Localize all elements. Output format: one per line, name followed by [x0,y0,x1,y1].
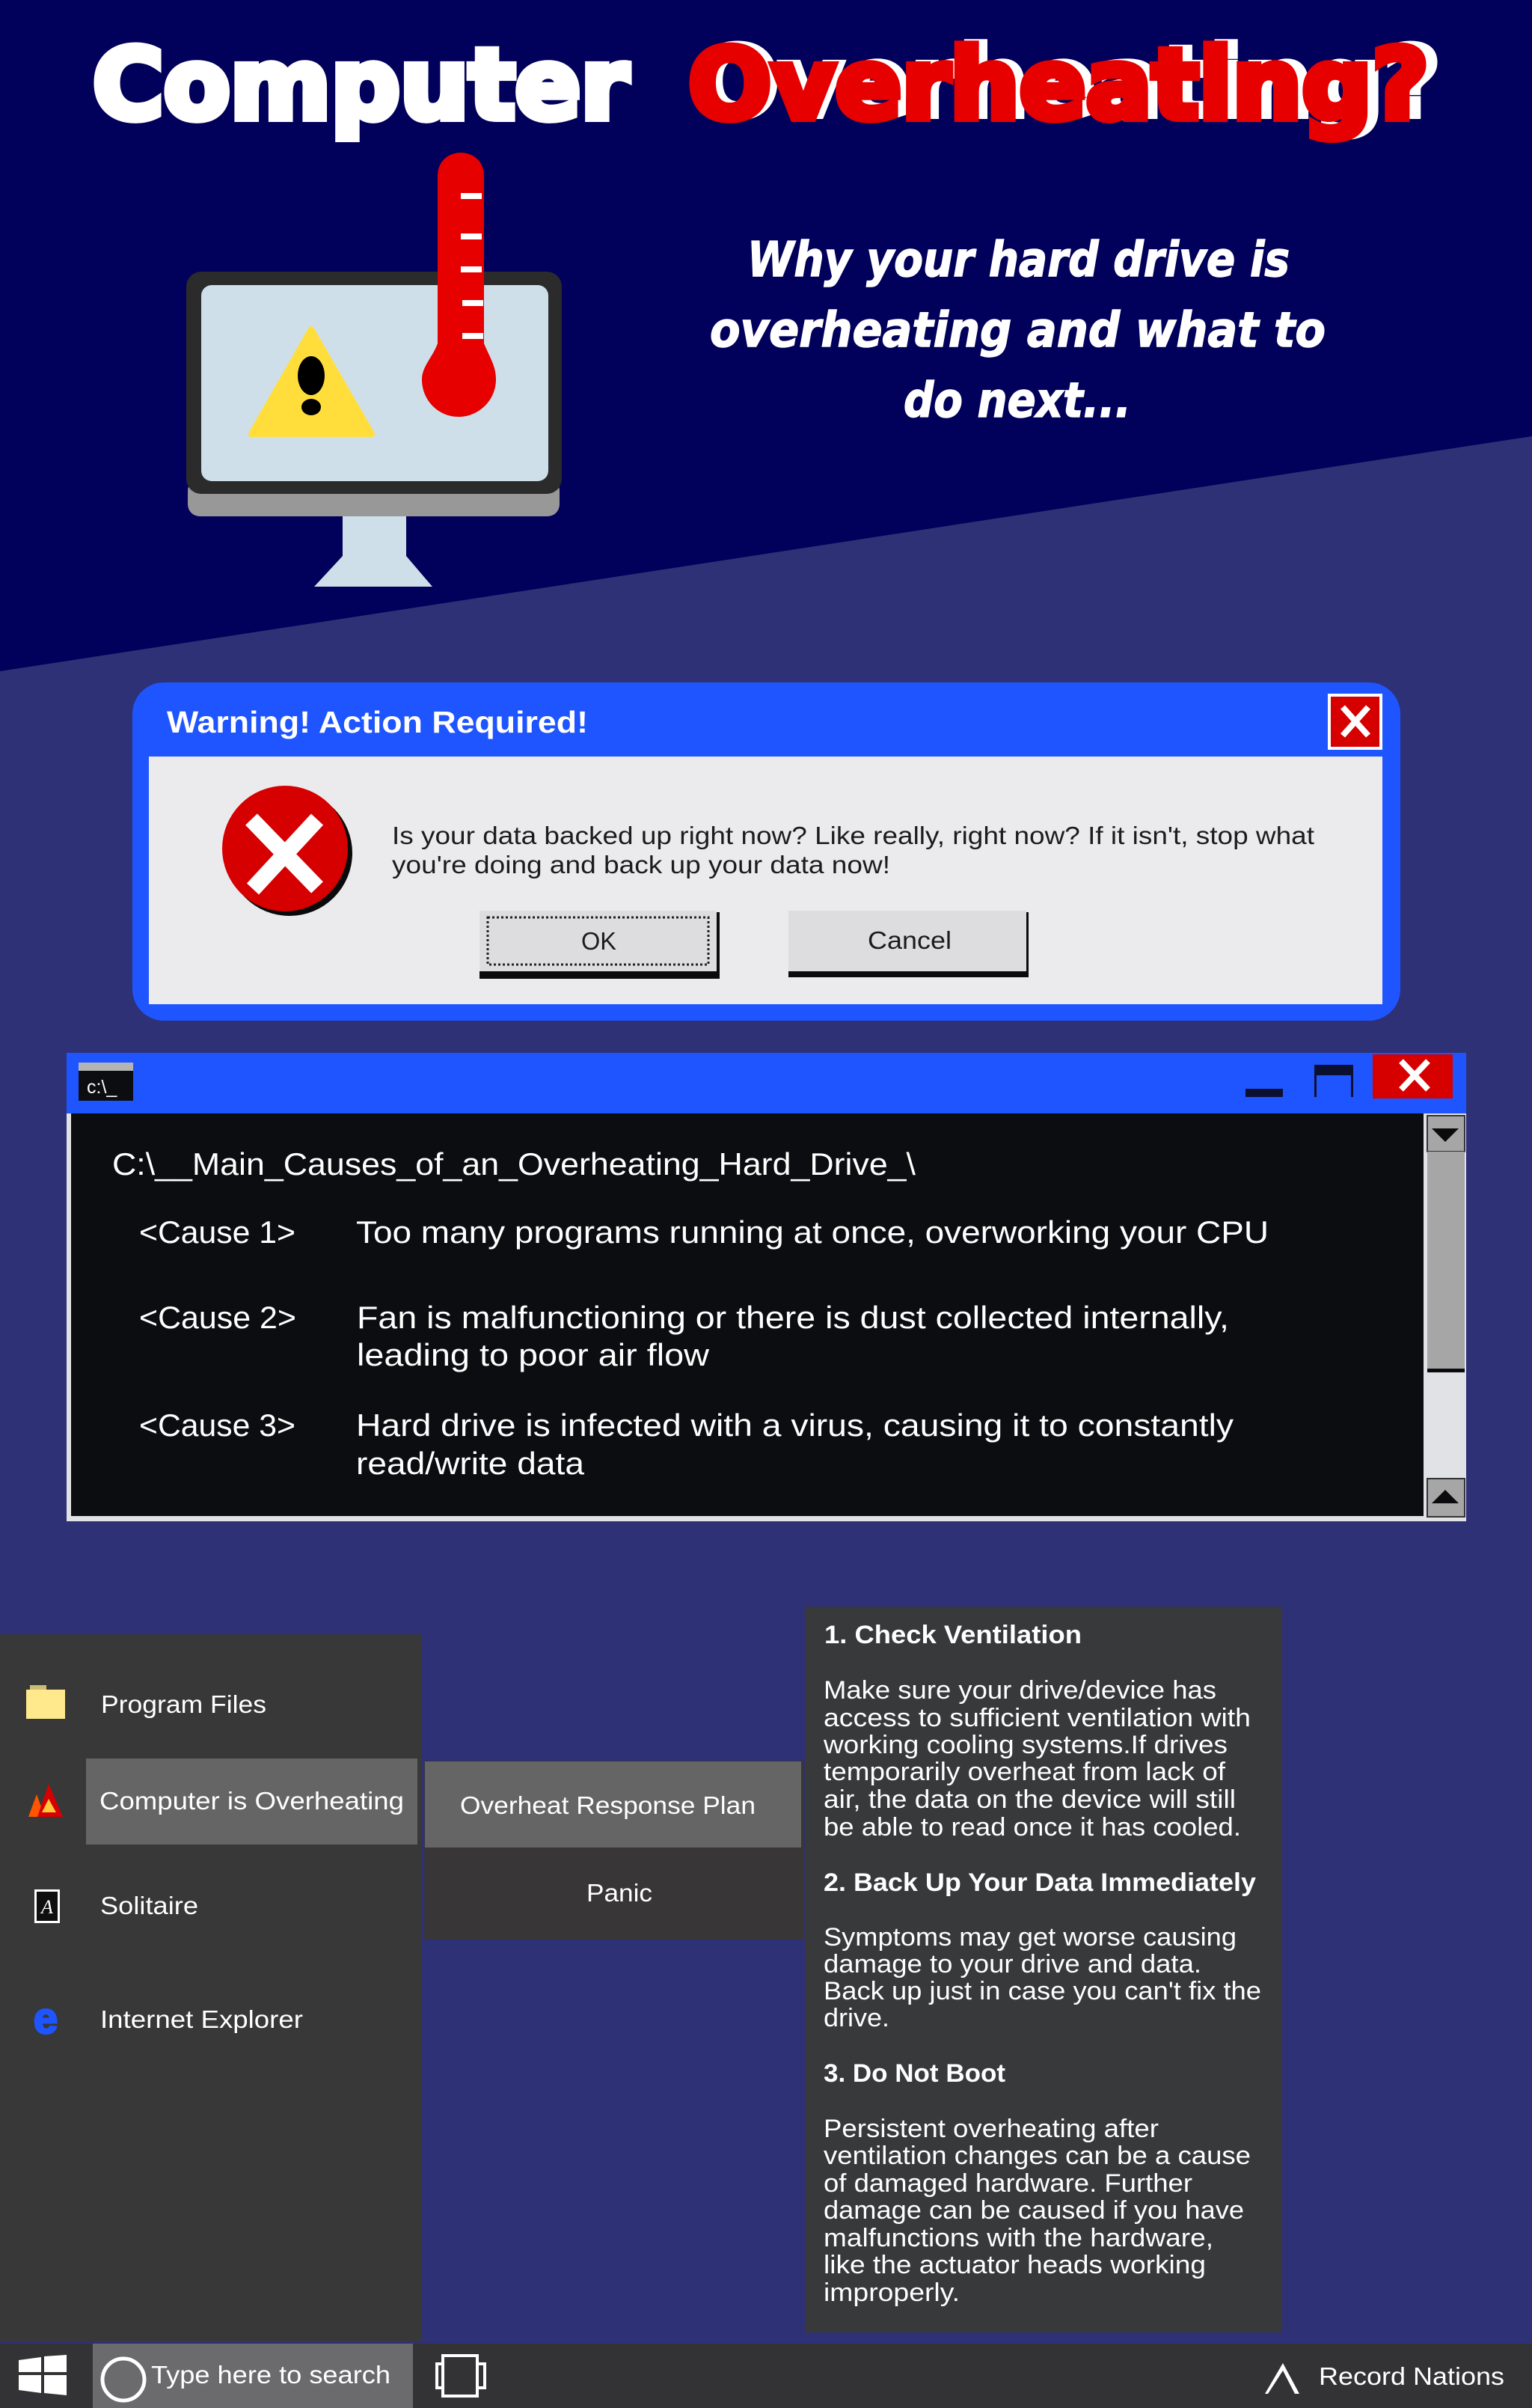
panel: command prompt causes window [67,1053,1466,1521]
title word: Computer: Computer [93,28,628,141]
menu item: Program Files: Program Files [101,1690,266,1718]
icon: task view [437,2356,485,2396]
highlighted submenu row [425,1761,801,1848]
icon: command prompt [79,1063,133,1101]
subtitle: do next... [904,373,1131,429]
monitor base [188,479,560,516]
step 3: do not boot: 3. Do Not Boot [824,2059,1005,2088]
taskbar background [0,2344,1532,2408]
cause 2: leading to poor air flow [357,1337,710,1372]
step 3: do not boot [824,2059,1251,2307]
icon: flame [28,1784,63,1817]
icon: folder [26,1685,65,1719]
icon: search circle [102,2359,144,2401]
title word: Overheating? white offset layer: Overheating? [696,25,1441,139]
icon: solitaire card [36,1890,58,1922]
menu item: Solitaire: Solitaire [100,1892,198,1919]
icon: solitaire card: A [40,1896,53,1918]
step 1: check ventilation: temporarily overheat from lack of [824,1758,1226,1786]
step 3: do not boot: Persistent overheating after [824,2115,1159,2143]
step 2: back up your data: 2. Back Up Your Data Immediately [824,1868,1256,1897]
dialog message: you're doing and back up your data now! [392,851,890,878]
cause 3 [139,1408,1234,1481]
monitor stand [314,515,432,587]
start menu background [0,1634,421,2341]
cause 1: <Cause 1> [139,1214,295,1250]
cause 2: Fan is malfunctioning or there is dust collected internally, [357,1300,1229,1335]
dialog message: Is your data backed up right now? Like really, right now? If it isn't, stop what [392,822,1314,849]
subtitle [710,233,1326,429]
monitor screen [201,285,548,481]
icon: internet explorer: e [34,1994,58,2043]
scrollbar [1427,1116,1465,1517]
step 3: do not boot: malfunctions with the hardware, [824,2224,1213,2252]
step 1: check ventilation: Make sure your drive/device has [824,1676,1216,1705]
terminal heading: C:\__Main_Causes_of_an_Overheating_Hard_Drive_\ [112,1146,916,1182]
cause 1: Too many programs running at once, overworking your CPU [356,1214,1269,1250]
panel: taskbar [0,2344,1532,2408]
icon: error circle [222,786,352,916]
subtitle: Why your hard drive is [747,233,1290,288]
step 3: do not boot: ventilation changes can be a cause [824,2142,1251,2170]
dialog heading: Warning! Action Required! [167,705,588,739]
window outer frame [67,1053,1466,1521]
step 1: check ventilation: access to sufficient ventilation with [824,1704,1251,1732]
cause 2: <Cause 2> [139,1300,296,1335]
step 2: back up your data: drive. [824,2004,889,2032]
cause 3: Hard drive is infected with a virus, causing it to constantly [356,1408,1234,1443]
menu item: Internet Explorer: Internet Explorer [100,2005,303,2033]
dialog content area [149,757,1382,1004]
step 1: check ventilation [823,1621,1251,1842]
icon: minimise button [1245,1089,1283,1097]
panel: warning dialog [132,682,1400,1021]
cause 3: <Cause 3> [139,1408,295,1443]
icon: warning triangle [251,329,372,434]
icon: maximise button [1314,1065,1353,1097]
submenu item: Overheat Response Plan: Overheat Response Plan [460,1791,756,1819]
icon: command prompt: c:\_ [87,1077,117,1098]
step 1: check ventilation: 1. Check Ventilation [824,1621,1082,1649]
submenu background [424,1761,804,1940]
step 3: do not boot: damage can be caused if you have [824,2196,1244,2225]
terminal body [71,1113,1424,1516]
search placeholder: Type here to search [151,2361,390,2389]
subtitle: overheating and what to [710,303,1326,358]
step 3: do not boot: improperly. [824,2279,960,2307]
window title bar [67,1053,1466,1113]
step 2: back up your data: Back up just in case you can't fix the [824,1977,1261,2005]
step 2: back up your data: damage to your drive and data. [824,1950,1201,1978]
monitor frame [186,272,562,494]
search box [93,2344,413,2408]
step 1: check ventilation: be able to read once it has cooled. [824,1813,1241,1842]
button: OK: OK [581,927,616,955]
title [93,25,1441,141]
icon: overheating monitor with thermometer [186,153,562,587]
title word: Overheating? red layer: Overheating? [688,28,1429,141]
dialog message [392,822,1314,878]
button: Cancel: Cancel [868,926,952,954]
cause 2 [139,1300,1229,1372]
icon: thermometer [422,153,496,417]
step 3: do not boot: like the actuator heads working [824,2251,1206,2279]
icon: windows logo [19,2355,67,2395]
submenu item: Panic: Panic [586,1879,652,1907]
panel: submenu [424,1761,804,1940]
step 2: back up your data: Symptoms may get worse causing [824,1923,1237,1952]
response plan background [805,1607,1282,2332]
panel: response plan [805,1607,1282,2332]
icon: close button [1373,1054,1453,1098]
highlighted menu row [86,1758,417,1845]
dialog window frame [132,682,1400,1021]
icon: record nations logo [1265,2363,1299,2394]
step 2: back up your data [824,1868,1261,2032]
step 3: do not boot: of damaged hardware. Further [824,2169,1192,2198]
step 1: check ventilation: air, the data on the device will still [824,1785,1236,1814]
menu item: Computer is Overheating: Computer is Overheating [99,1787,404,1815]
icon: dialog close button [1329,695,1381,748]
brand name: Record Nations [1319,2362,1504,2390]
panel: start menu [0,1634,421,2341]
button: OK [479,911,720,979]
step 1: check ventilation: working cooling systems.If drives [823,1731,1228,1759]
button: Cancel [788,911,1029,977]
cause 3: read/write data [356,1446,585,1481]
